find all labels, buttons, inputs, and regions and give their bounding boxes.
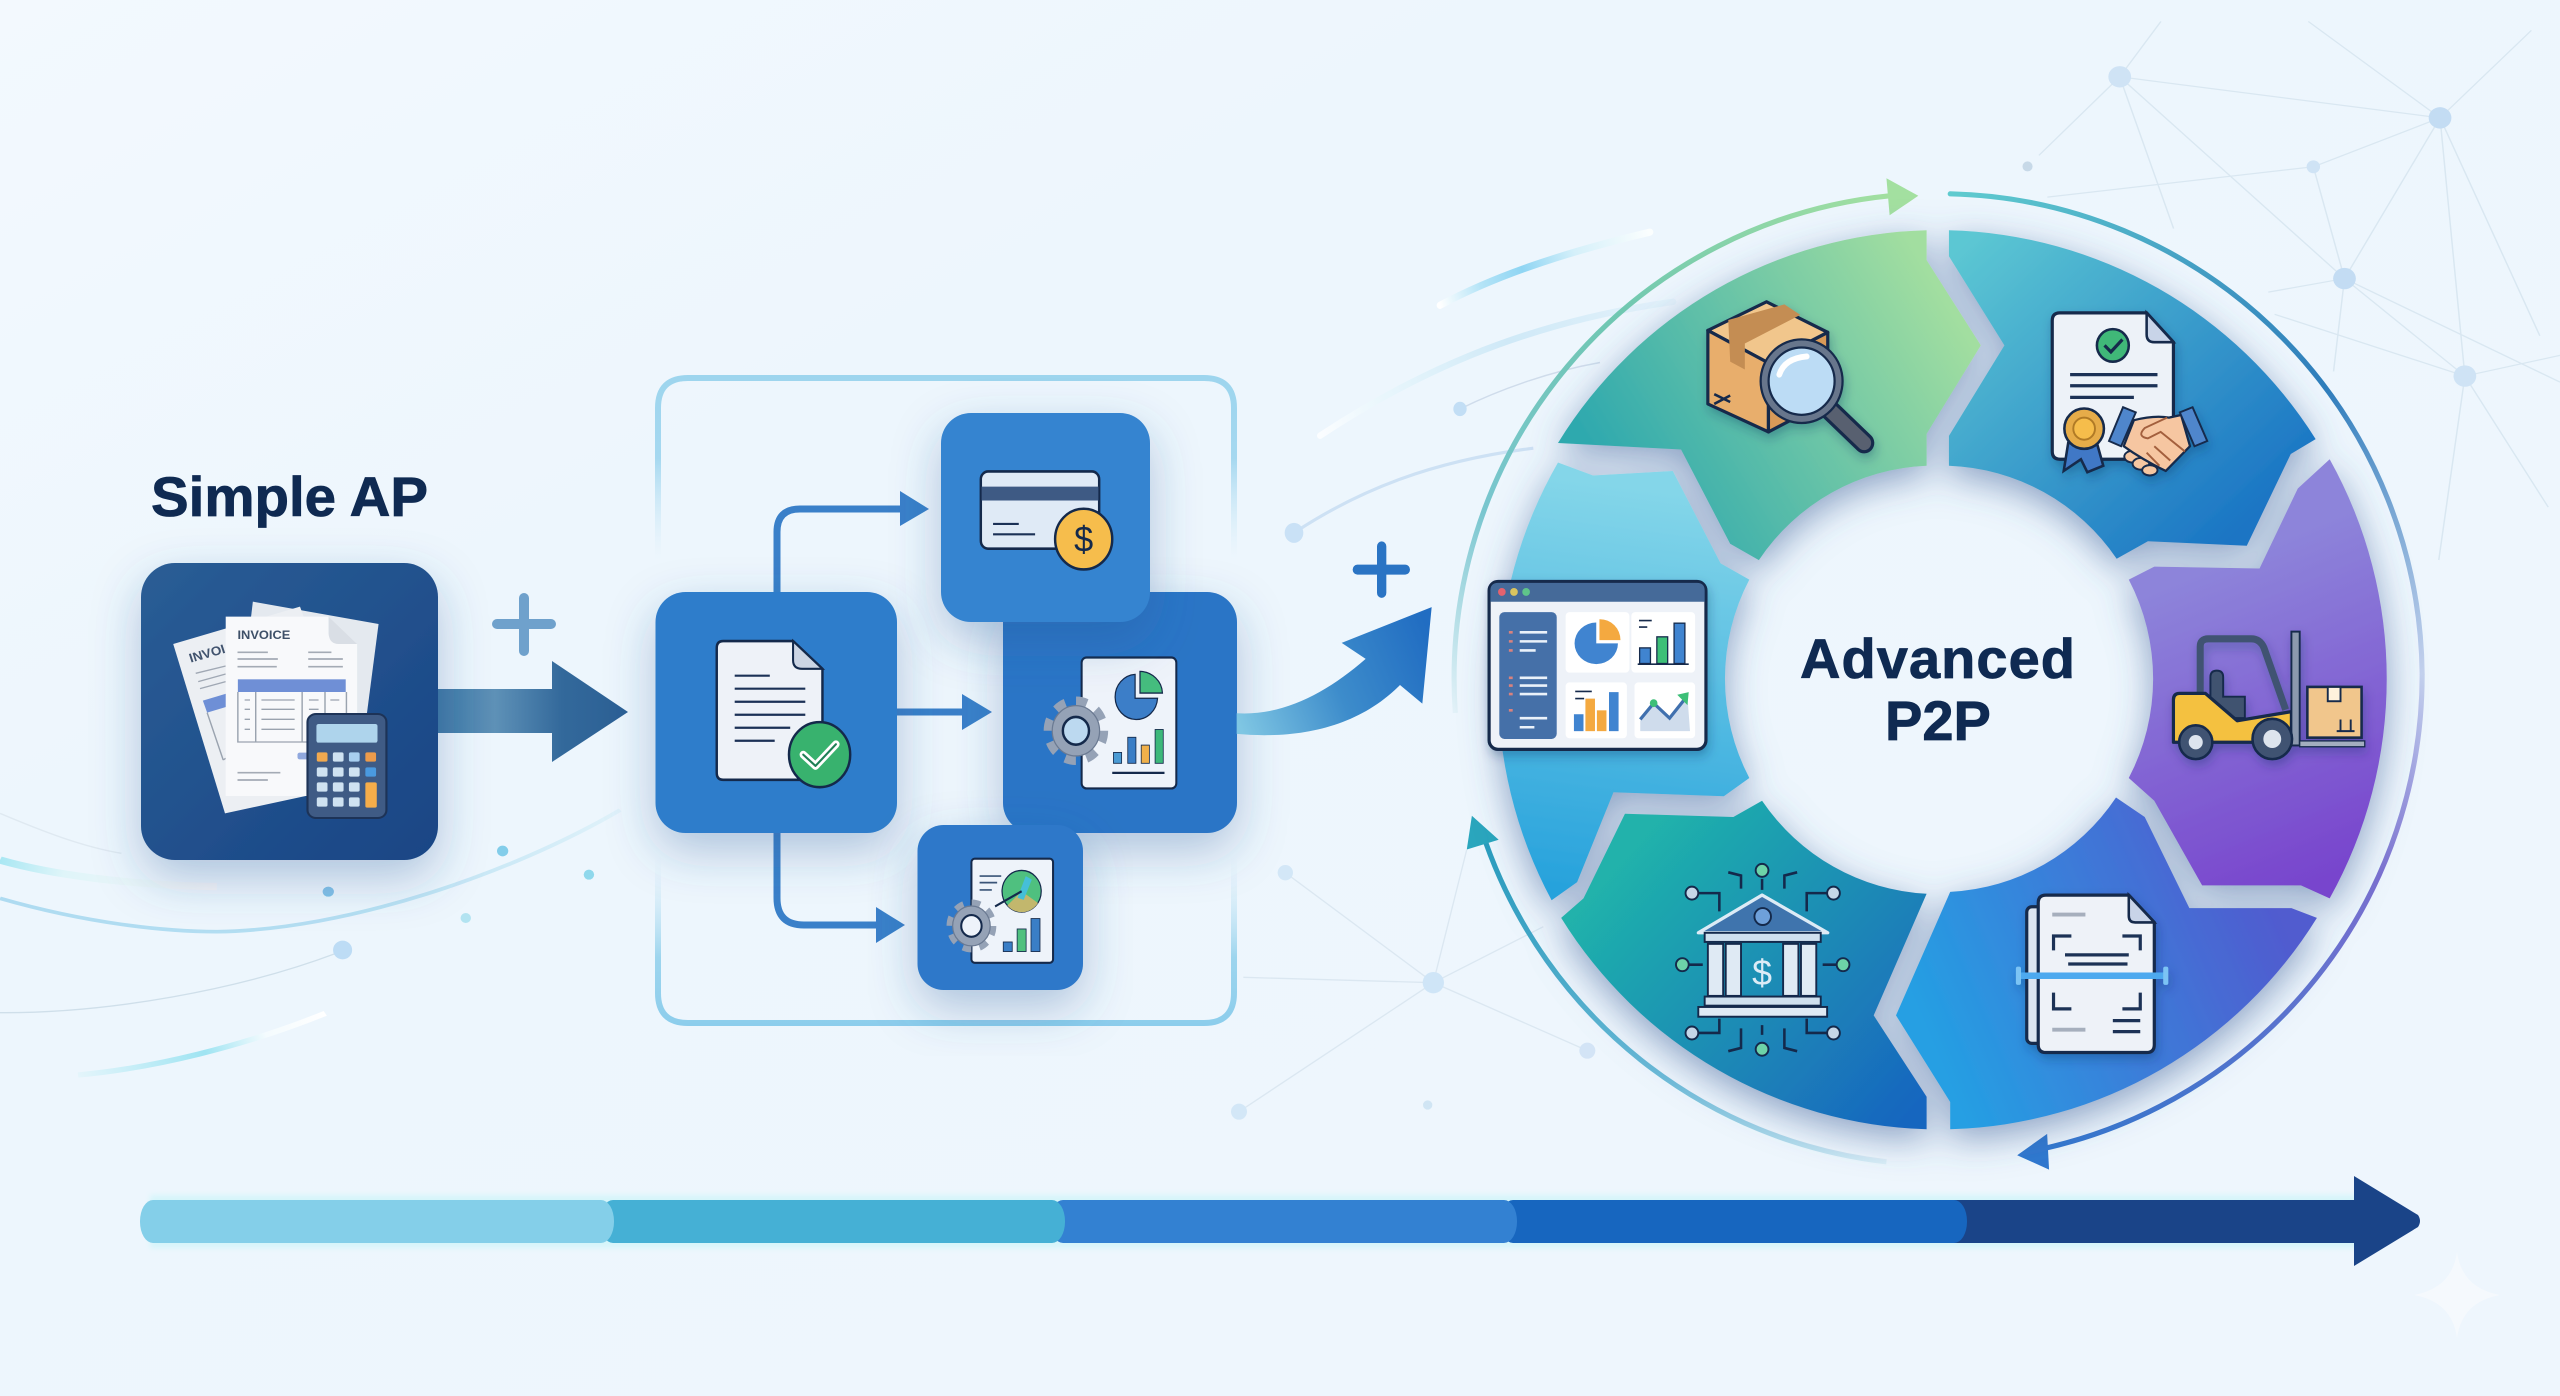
timeline stage 1 xyxy=(140,1200,614,1243)
icon: analytics dashboard xyxy=(1489,582,1706,749)
ring arrow: bottom left xyxy=(1467,816,1886,1162)
cycle segments xyxy=(1498,230,2387,1129)
connector: to payment card xyxy=(777,491,929,600)
icon: invoices and calculator: INVOICE xyxy=(237,628,290,642)
background streaks: lower left xyxy=(0,810,620,1075)
background network: top right xyxy=(2022,21,2560,560)
timeline stage 5: darkest arrow xyxy=(1950,1176,2420,1266)
timeline progress arrow xyxy=(140,1176,2420,1266)
panel: validated document card xyxy=(656,592,897,833)
connector: to reporting xyxy=(777,825,905,943)
segment: analytics (sky blue) xyxy=(1498,462,1749,900)
plus sign: before Advanced P2P xyxy=(1357,546,1405,593)
panel: reporting card xyxy=(918,825,1083,990)
timeline stage 4 xyxy=(1500,1200,1967,1243)
background streaks: upper middle xyxy=(1285,232,1673,543)
icon: credit card and coin xyxy=(981,471,1112,569)
arrow: Simple AP to workflow xyxy=(438,661,628,762)
icon: credit card and coin: $ xyxy=(1074,520,1094,560)
title: Advanced P2P: P2P xyxy=(1885,689,1991,752)
ring arrow: right xyxy=(1950,194,2422,1170)
segment: sourcing (green) xyxy=(1558,230,1981,560)
icon: forklift xyxy=(2173,632,2365,759)
icon: invoices and calculator xyxy=(173,602,386,818)
timeline stage 3 xyxy=(1050,1200,1517,1243)
ring arrow: top left xyxy=(1454,178,1918,713)
panel: Advanced P2P cycle xyxy=(1454,178,2422,1170)
connector: to analytics xyxy=(890,694,992,730)
icon: digital bank: $ xyxy=(1752,952,1772,993)
panel: payment card xyxy=(941,413,1150,622)
segment: invoice capture (blue) xyxy=(1896,797,2317,1129)
title: Advanced P2P: Advanced xyxy=(1800,627,2075,690)
segment: contracts (teal-blue) xyxy=(1949,230,2316,559)
background network: bottom centre xyxy=(1231,850,1595,1120)
panel: analytics card xyxy=(1003,592,1237,833)
icon: invoices and calculator: INVOI xyxy=(187,642,227,665)
arrow: curved arrow to Advanced P2P xyxy=(1237,607,1432,735)
heading: Simple AP: Simple AP xyxy=(151,465,428,528)
segment: bank payments (teal to blue) xyxy=(1561,801,1927,1129)
segment: receiving (purple) xyxy=(2129,459,2387,898)
icon: document with check xyxy=(717,641,850,787)
icon: digital bank xyxy=(1676,864,1849,1056)
icon: report with gear xyxy=(1049,657,1176,788)
timeline stage 2 xyxy=(600,1200,1065,1243)
icon: small report with gear xyxy=(951,859,1053,963)
icon: box and magnifier xyxy=(1708,302,1864,443)
icon: contract and handshake xyxy=(2052,313,2207,475)
decorative sparkle xyxy=(2414,1252,2500,1338)
plus sign: after Simple AP xyxy=(497,598,551,651)
panel: Simple AP card xyxy=(141,563,438,860)
icon: document scan xyxy=(2016,895,2168,1052)
panel: workflow frame xyxy=(658,378,1234,1023)
